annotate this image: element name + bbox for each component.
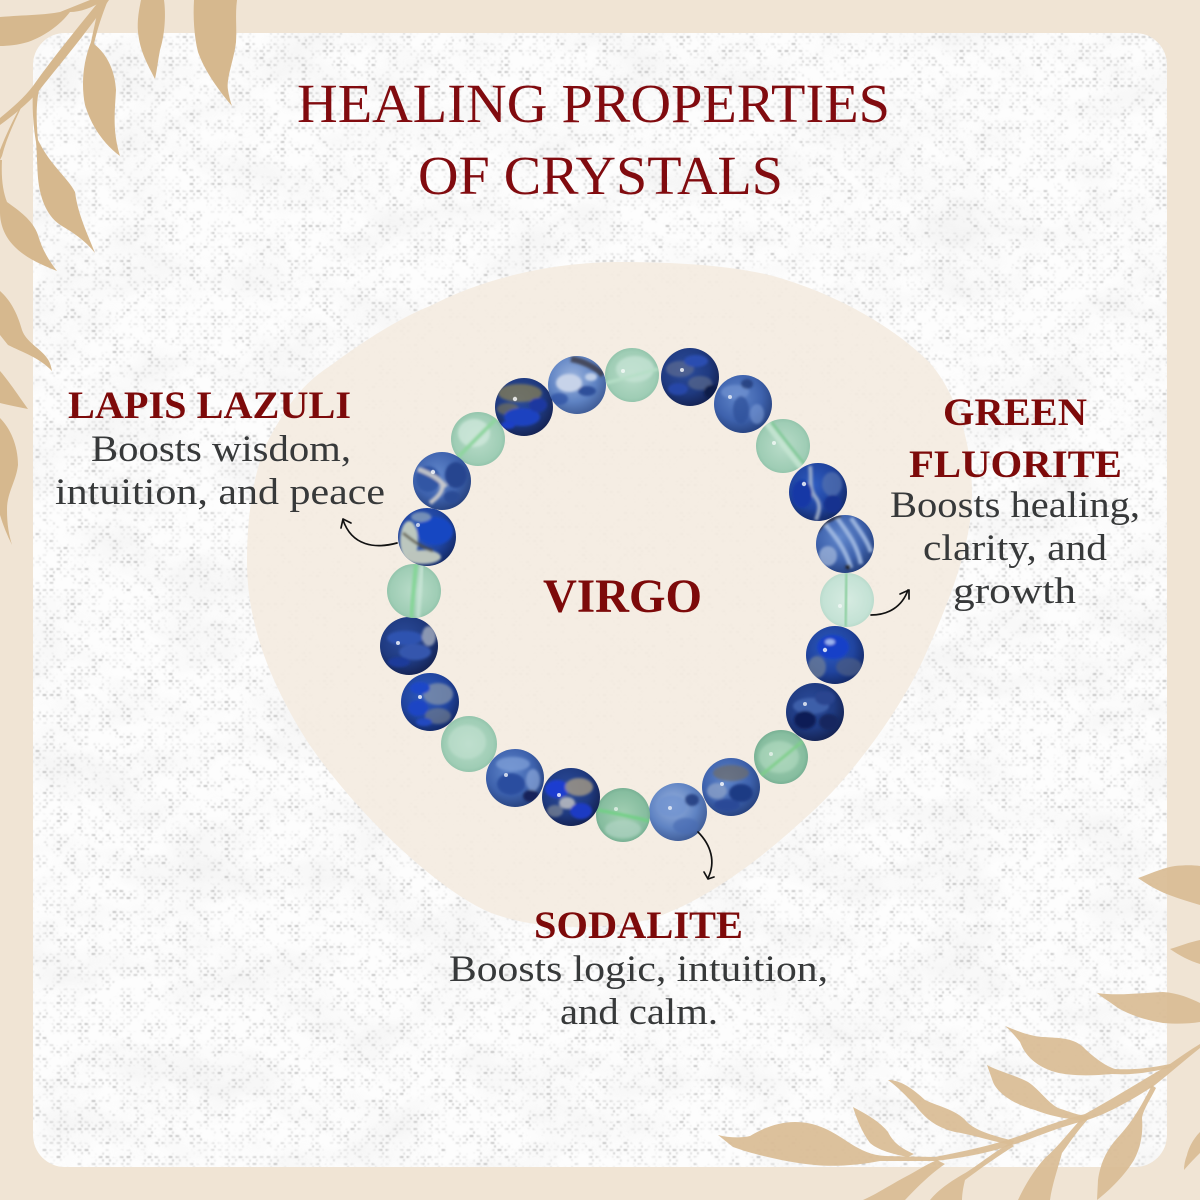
bead: lapis 10: [806, 626, 864, 684]
bead: sodalite 11: [786, 683, 844, 741]
bead: lapis 13: [702, 758, 760, 816]
bead: lapis 7: [789, 463, 847, 521]
text: Lapis Lazuli description: [55, 429, 385, 513]
bead: sodalite 20: [380, 617, 438, 675]
bead: green fluorite 9: [820, 573, 874, 627]
text: Lapis Lazuli description: Boosts wisdom,: [91, 429, 351, 470]
bead: green fluorite 6: [756, 419, 810, 473]
decoration: top-left leaves: [0, 0, 237, 545]
bead: lapis 16: [542, 768, 600, 826]
text: Sodalite description: Boosts logic, intuition,: [449, 949, 828, 990]
text: Sodalite description: [449, 949, 828, 1033]
bead: sodalite 5: [714, 375, 772, 433]
title: HEALING PROPERTIES: [297, 73, 890, 134]
title: OF CRYSTALS: [418, 145, 783, 206]
bead: green fluorite 3: [605, 348, 659, 402]
bead: sodalite 23: [413, 452, 471, 510]
bead: green fluorite 21: [387, 564, 441, 618]
bead: lapis 1: [495, 378, 553, 436]
heading: Sodalite: SODALITE: [534, 904, 743, 947]
bead: sodalite 8: [816, 515, 874, 573]
callout: Lapis Lazuli: [55, 384, 385, 513]
heading: Green Fluorite: [909, 391, 1122, 486]
arrow: to Green Fluorite text: [871, 590, 909, 615]
bead: sodalite 2: [548, 356, 606, 414]
text: Green Fluorite description: [890, 485, 1140, 612]
bracelet: [380, 348, 874, 842]
heading: Green Fluorite: FLUORITE: [909, 443, 1122, 486]
bead: green fluorite 18: [441, 716, 497, 772]
bead: lapis 22: [398, 508, 456, 566]
text: Lapis Lazuli description: intuition, and peace: [55, 472, 385, 513]
bead: green fluorite 12: [754, 730, 808, 784]
bead: sodalite 14: [649, 783, 707, 841]
callout: Green Fluorite: [890, 391, 1140, 612]
arrow: to Sodalite text: [698, 832, 714, 879]
text: Green Fluorite description: Boosts healing,: [890, 485, 1140, 526]
bead: green fluorite 24: [451, 412, 505, 466]
cream blob behind bracelet: [247, 262, 972, 927]
title: [297, 73, 890, 206]
bead: sodalite 17: [486, 749, 544, 807]
heading: Green Fluorite: GREEN: [943, 391, 1087, 434]
bead: lapis 4: [661, 348, 720, 406]
callout: Sodalite: [449, 904, 828, 1033]
bead: green fluorite 15: [596, 788, 650, 842]
decoration: bottom-right leaves: [718, 865, 1200, 1200]
bead: lapis 19: [401, 673, 459, 731]
text: Green Fluorite description: clarity, and: [923, 528, 1108, 569]
text: Sodalite description: and calm.: [560, 992, 718, 1033]
arrow: to Lapis Lazuli text: [341, 519, 397, 546]
heading: Lapis Lazuli: LAPIS LAZULI: [68, 384, 351, 427]
centre label: Virgo: VIRGO: [543, 570, 702, 623]
text: Green Fluorite description: growth: [953, 571, 1077, 612]
